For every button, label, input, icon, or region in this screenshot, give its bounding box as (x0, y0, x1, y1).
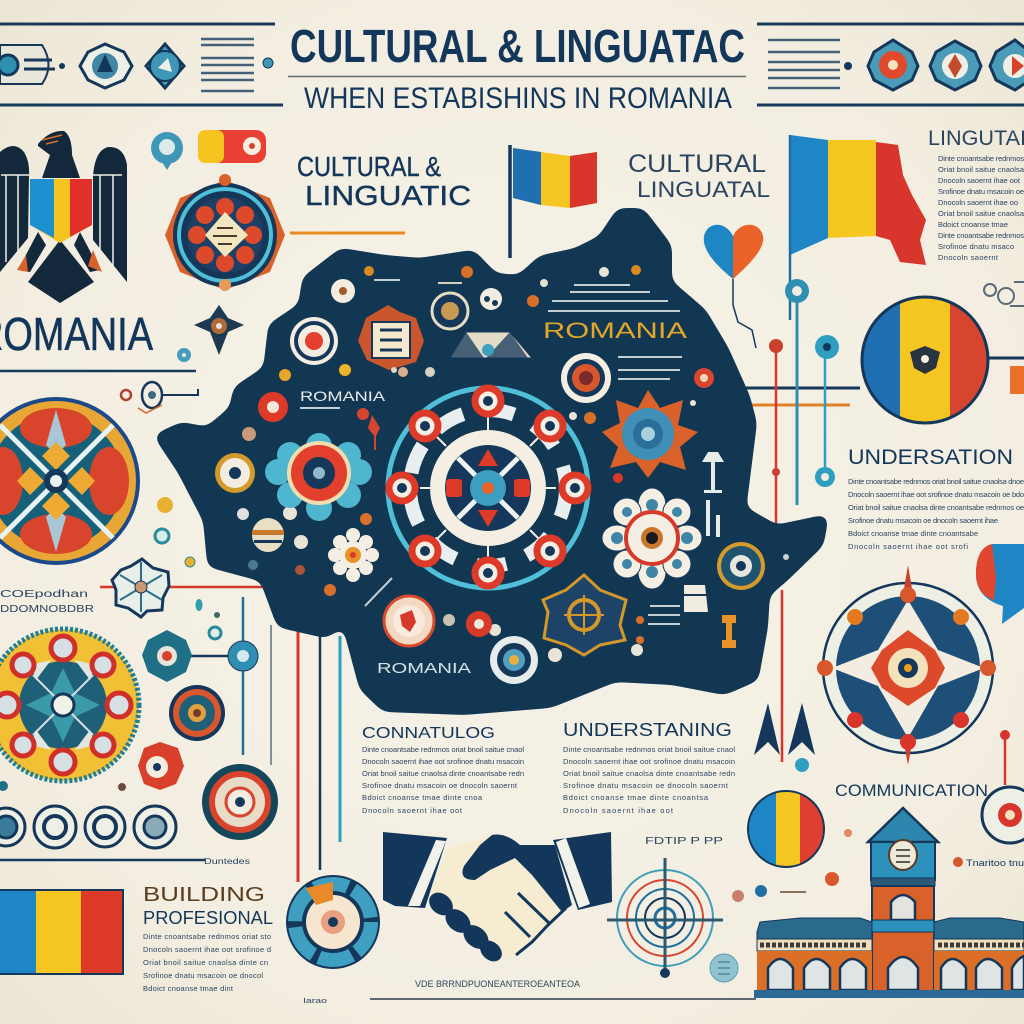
red disc lower (384, 596, 434, 646)
red disc small (258, 392, 288, 422)
caption fragment left: COEpodhan (0, 589, 88, 600)
gold star badge (543, 575, 626, 655)
label: romania left: ROMANIA (300, 388, 386, 404)
icon: gauge circle (982, 730, 1024, 843)
heading line two: LINGUATIC (305, 180, 471, 211)
small icons left (155, 497, 195, 567)
teal drops (196, 599, 221, 639)
small marks right (984, 282, 1024, 306)
dots lower right (732, 829, 963, 902)
hat icon (252, 518, 284, 552)
text block top right: Dnocoln saoernt ihae oo (938, 198, 1018, 207)
small dots near badges (0, 781, 126, 791)
heading: understaning: UNDERSTANING (563, 720, 732, 740)
text block top right: Oriat bnoil saitue cnaolsa (938, 209, 1024, 218)
heading: communication: COMMUNICATION (835, 782, 988, 800)
text block mid right: Dinte cnoantsabe rednmos oriat bnoil saitue cnaolsa dnoe (848, 477, 1024, 486)
orange post icon (722, 615, 736, 648)
footer fragments: Duntedes (204, 857, 250, 866)
text block connatulog: Oriat bnoil saitue cnaolsa dinte cnoantsabe redn (362, 769, 524, 778)
label: romania bottom: ROMANIA (377, 660, 471, 677)
small lantern (694, 368, 714, 388)
text block building: Srofinoe dnatu msacoin oe dnocol (143, 971, 263, 980)
text block mid right (848, 477, 1024, 551)
caption right of tower: Tnaritoo tnu (966, 858, 1024, 868)
connector lines right (100, 300, 860, 882)
caption fragment left (0, 589, 94, 615)
white pot icon (684, 585, 708, 612)
handshake (383, 832, 612, 966)
building: town hall (754, 808, 1024, 998)
medallion top left (165, 174, 285, 291)
connector nodes right (769, 279, 839, 487)
white post icons (702, 452, 724, 537)
text block top right: Oriat bnoil saitue cnaolsa (938, 165, 1024, 174)
target icon (607, 858, 723, 978)
orange connector (290, 232, 405, 234)
text block top right: Dnocoln saoernt (938, 253, 999, 262)
heading: connatulog: CONNATULOG (362, 725, 495, 742)
header icons left (0, 39, 273, 91)
blue node (228, 641, 258, 671)
text block connatulog: Dnocoln saoernt ihae oot (362, 806, 463, 815)
red disc small lower (466, 611, 492, 637)
row of four badges (0, 806, 176, 848)
rule lower left (0, 859, 205, 861)
icon: pin (151, 132, 183, 170)
footer fragments: VDE BRRNDPUONEANTEROEANTEOA (415, 979, 580, 989)
small ring top (331, 279, 355, 303)
text block understaning: Oriat bnoil saitue cnaolsa dinte cnoantsabe redn (563, 769, 735, 778)
text block understaning: Dnocoln saoernt ihae oot srofinoe dnatu msacoin (563, 757, 735, 766)
red disc upper left (290, 317, 338, 365)
heading: profesional: PROFESIONAL (143, 908, 273, 928)
white flower small (328, 528, 379, 582)
icon: heart (704, 225, 763, 348)
red flower (138, 742, 184, 790)
text block understaning: Bdoict cnoanse tmae dinte cnoantsa (563, 793, 709, 802)
large flag right (790, 135, 926, 320)
title: CULTURAL & LINGUATAC (290, 20, 745, 72)
text block mid right: Dnocoln saoernt ihae oot srofinoe dnatu msacoin oe bdo (848, 490, 1024, 499)
label: romania gold: ROMANIA (543, 318, 687, 343)
subtitle: WHEN ESTABISHINS IN ROMANIA (304, 82, 732, 115)
text block top right: Srofinoe dnatu msaco (938, 242, 1014, 251)
text block building (143, 932, 271, 993)
title divider (288, 76, 746, 78)
text block top right: Dinte cnoantsabe rednmos (938, 231, 1024, 240)
small dotted disc (480, 288, 502, 310)
text block understaning: Srofinoe dnatu msacoin oe dnocoln saoernt (563, 781, 729, 790)
flag bottom left (0, 890, 123, 974)
icons: double arrows (754, 703, 815, 772)
red torch (368, 415, 380, 450)
text block connatulog: Srofinoe dnatu msacoin oe dnocoln saoernt (362, 781, 518, 790)
text block connatulog: Bdoict cnoanse tmae dinte cnoa (362, 793, 483, 802)
text block understaning: Dinte cnoantsabe rednmos oriat bnoil saitue cnaol (563, 745, 735, 754)
dotted ring bottom (490, 636, 538, 684)
circle flag top right (860, 295, 1024, 425)
text block mid right: Dnocoln saoernt ihae oot srofi (848, 542, 968, 551)
square badge (358, 305, 424, 370)
map of Romania (160, 213, 823, 710)
text block building: Dnocoln saoernt ihae oot srofinoe d (143, 945, 271, 954)
central wheel (388, 388, 588, 588)
header icons right (768, 40, 1024, 90)
flag centre (510, 145, 597, 258)
rule under ROMANIA (0, 370, 196, 372)
icon: coloured pill (198, 130, 266, 163)
text block mid right: Oriat bnoil saitue cnaolsa dinte cnoantsabe rednmos oe (848, 503, 1024, 512)
heading: understation: UNDERSATION (848, 446, 1013, 469)
connector in map (365, 578, 392, 606)
teal badge left (142, 630, 192, 682)
text block building: Dinte cnoantsabe rednmos oriat sto (143, 932, 271, 941)
text block top right: Bdoict cnoanse tmae (938, 220, 1008, 229)
heading: linguatal: LINGUATAL (637, 177, 770, 202)
text block mid right: Srofinoe dnatu msacoin oe dnocoln saoernt ihae (848, 516, 998, 525)
medallion right (817, 565, 996, 765)
text block top right: Srofinoe dnatu msacoin oe (938, 187, 1024, 196)
small round icon (710, 954, 738, 982)
text block connatulog (362, 745, 524, 815)
ring upper right (561, 353, 611, 403)
heading: cultural: CULTURAL (628, 150, 766, 178)
white flower large (602, 488, 702, 589)
heading: lingutai: LINGUTAI (928, 127, 1024, 150)
text block top right (938, 154, 1024, 262)
orange star blue disc (602, 390, 698, 478)
text block mid right: Bdoict cnoanse tmae dinte cnoantsabe (848, 529, 978, 538)
Romanian eagle with shield (0, 131, 127, 303)
small dots in map (237, 265, 789, 662)
medallion small red (169, 685, 225, 741)
caption fragment left: DDOMNOBDBR (0, 604, 94, 615)
text block building: Oriat bnoil saitue cnaolsa dinte cn (143, 958, 268, 967)
amber ring left (215, 453, 255, 493)
triangle panel (450, 332, 532, 358)
bell ring (432, 283, 468, 329)
icon small dot (177, 348, 191, 362)
footer fragments: FDTIP P PP (645, 836, 723, 847)
star icon left (112, 559, 169, 617)
lines in map (300, 280, 682, 624)
icon: speech bubble (976, 544, 1024, 624)
medallion bottom (202, 764, 278, 840)
footer fragments: Iarao (303, 996, 327, 1005)
amber ring lower right (717, 542, 765, 590)
heading: cultural and linguatic: CULTURAL & (297, 151, 441, 182)
blue flower red disc (265, 433, 372, 521)
medallion left upper (0, 397, 140, 565)
text block connatulog: Dinte cnoantsabe rednmos oriat bnoil saitue cnaol (362, 745, 524, 754)
footer fragments (204, 836, 723, 1005)
bottom rule (370, 998, 756, 1000)
icon node (121, 382, 198, 413)
text block building: Bdoict cnoanse tmae dint (143, 984, 234, 993)
heading: building: BUILDING (143, 884, 265, 906)
text block understaning (563, 745, 735, 815)
text block top right: Dinte cnoantsabe rednmos (938, 154, 1024, 163)
circle flag lower right (748, 790, 828, 868)
icon diamond (194, 305, 244, 355)
text block top right: Dnocoln saoernt ihae oot (938, 176, 1021, 185)
text block understaning: Dnocoln saoernt ihae oot (563, 806, 674, 815)
text block connatulog: Dnocoln saoernt ihae oot srofinoe dnatu msacoin (362, 757, 524, 766)
circle dial bottom (286, 875, 380, 969)
header rules (0, 24, 1024, 105)
medallion left lower (0, 629, 139, 781)
